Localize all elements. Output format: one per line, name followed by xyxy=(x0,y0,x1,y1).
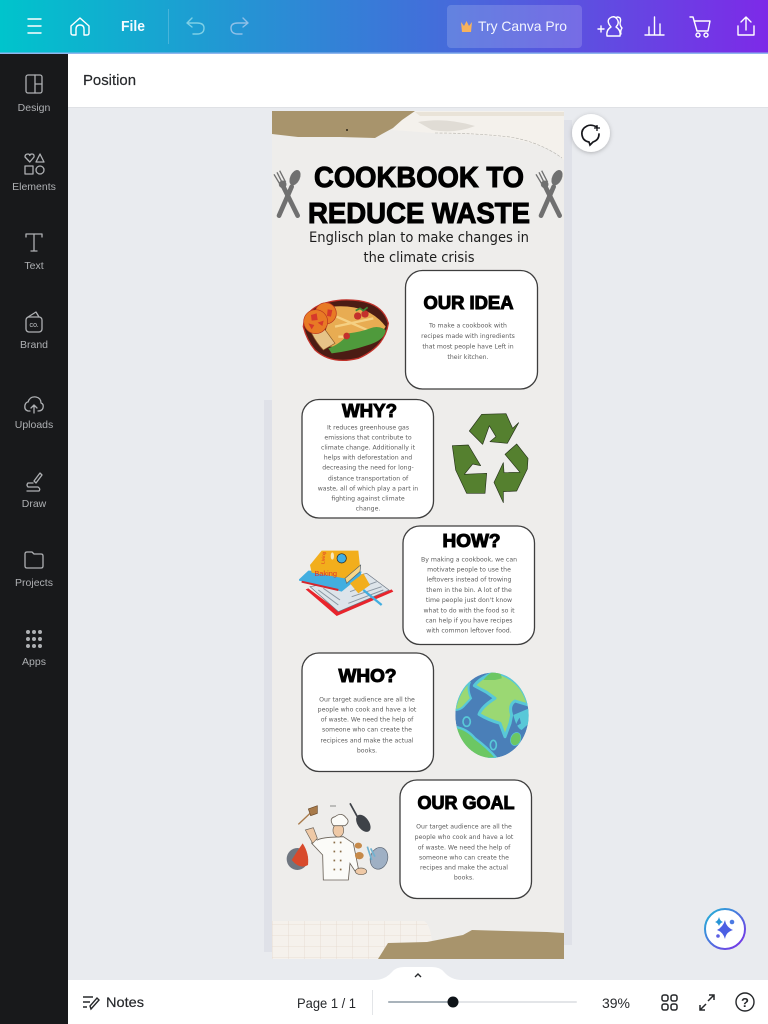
brand tab: Brand xyxy=(20,339,48,351)
button: add comment xyxy=(572,114,610,152)
projects tab xyxy=(15,552,53,589)
card: why: helps with deforestation and xyxy=(324,454,412,462)
torn brown paper top xyxy=(272,111,415,138)
apps tab xyxy=(22,630,46,668)
position bar: Position xyxy=(83,73,136,89)
page indicator: Page 1 / 1 xyxy=(297,995,356,1011)
design tab: Design xyxy=(18,102,51,114)
card: our idea: their kitchen. xyxy=(447,354,489,361)
card: how: By making a cookbook, we can xyxy=(421,556,517,564)
brand tab xyxy=(20,312,48,351)
card: how: them in the bin. A lot of the xyxy=(426,587,512,594)
brand tab: CO. xyxy=(30,323,39,329)
file menu: File xyxy=(121,19,145,35)
notes button: Notes xyxy=(106,994,144,1010)
card: our idea xyxy=(406,270,538,389)
icon: add people xyxy=(598,17,622,36)
card: how: what to do with the food so it xyxy=(423,608,515,614)
card: why: distance transportation of xyxy=(328,476,409,482)
illustration: food bowl xyxy=(303,300,388,360)
card: who: people who cook and have a lot xyxy=(318,706,417,714)
card: our idea: that most people have Left in xyxy=(422,344,514,350)
icon: insights xyxy=(645,17,664,35)
card: who: recipices and make the actual xyxy=(320,738,414,744)
illustration: cookbooks: Baking xyxy=(314,569,337,578)
card: who: Our target audience are all the xyxy=(319,696,415,704)
text tab xyxy=(24,234,44,272)
card: our goal: books. xyxy=(454,874,474,882)
torn white paper top xyxy=(392,111,564,160)
icon: earth xyxy=(454,671,529,760)
top toolbar xyxy=(0,0,768,54)
card: why: It reduces greenhouse gas xyxy=(327,424,409,432)
projects tab: Projects xyxy=(15,577,53,589)
draw tab xyxy=(22,473,47,510)
card: our goal: Our target audience are all the xyxy=(416,824,512,830)
icon: redo xyxy=(231,18,248,34)
illustration: chef xyxy=(287,803,390,880)
card: our goal: someone who can create the xyxy=(419,854,509,862)
title: REDUCE WASTE xyxy=(308,198,530,230)
torn brown paper bottom xyxy=(378,930,564,959)
card: how xyxy=(403,526,534,644)
icon: menu xyxy=(28,19,41,33)
card: who: of waste. We need the help of xyxy=(321,716,414,724)
card: our idea: recipes made with ingredients xyxy=(421,333,515,340)
card: our goal: people who cook and have a lot xyxy=(415,834,514,841)
card: how: HOW? xyxy=(442,531,500,551)
icon: help xyxy=(736,993,754,1011)
icon: fullscreen xyxy=(700,995,714,1010)
try canva pro button xyxy=(447,5,582,48)
uploads tab xyxy=(15,397,53,431)
card: why: WHY? xyxy=(342,401,397,421)
card: our goal xyxy=(400,780,532,898)
card: why xyxy=(302,400,434,518)
subtitle: Englisch plan to make changes in xyxy=(309,230,529,246)
card: how: can help if you have recipes xyxy=(425,618,513,624)
position bar xyxy=(68,54,768,108)
card: why: climate change. Additionally it xyxy=(321,444,416,452)
card: who: WHO? xyxy=(338,666,396,686)
icon: share xyxy=(738,17,754,35)
elements tab: Elements xyxy=(12,181,56,193)
card: our goal: OUR GOAL xyxy=(418,793,515,813)
card: why: waste, all of which play a part in xyxy=(318,486,418,492)
card: why: emissions that contribute to xyxy=(324,434,412,442)
icon: home xyxy=(71,18,89,35)
zoom percentage: 39% xyxy=(602,995,630,1011)
card: why: change. xyxy=(356,506,380,512)
card: our goal: of waste. We need the help of xyxy=(418,844,511,852)
icon: fork and spoon left xyxy=(274,168,303,216)
icon: fork and spoon right xyxy=(536,168,565,216)
card: who: someone who can create the xyxy=(322,726,412,734)
subtitle: the climate crisis xyxy=(364,250,474,266)
card: how: with common leftover food. xyxy=(426,628,512,634)
icon: cart xyxy=(690,17,710,31)
bottom bar xyxy=(0,967,768,1024)
illustration: cookbooks xyxy=(299,551,393,616)
page shadow strips xyxy=(264,120,572,952)
card: our idea: To make a cookbook with xyxy=(428,322,507,330)
left sidebar xyxy=(0,54,68,1024)
title: COOKBOOK TO xyxy=(314,162,524,194)
design tab xyxy=(18,75,51,114)
grid paper bottom xyxy=(272,921,432,959)
card: who: books. xyxy=(357,748,377,754)
icon: caret xyxy=(415,974,421,977)
illustration: cookbooks: Living xyxy=(320,551,326,564)
try canva pro button: Try Canva Pro xyxy=(478,18,567,34)
title xyxy=(308,162,530,230)
icon: undo xyxy=(187,18,204,34)
card: why: decreasing the need for long- xyxy=(322,464,414,472)
card: how: time people just don't know xyxy=(426,597,512,604)
infographic page xyxy=(272,111,565,959)
subtitle xyxy=(309,230,529,266)
icon: help: ? xyxy=(741,995,749,1010)
panel collapse tab xyxy=(374,967,462,980)
card: why: fighting against climate xyxy=(331,496,405,502)
card: our idea: OUR IDEA xyxy=(424,293,514,313)
icon: crown xyxy=(461,21,472,32)
uploads tab: Uploads xyxy=(15,419,53,431)
card: how: leftovers instead of trowing xyxy=(427,576,512,584)
card: how: motivate people to use the xyxy=(427,566,511,574)
icon: recycle xyxy=(452,414,528,503)
zoom slider xyxy=(388,996,577,1008)
text tab: Text xyxy=(24,260,44,272)
elements tab xyxy=(12,154,56,193)
card: who xyxy=(302,653,434,772)
apps tab: Apps xyxy=(22,656,46,668)
notes button xyxy=(83,994,144,1010)
card: our goal: recipes and make the actual xyxy=(420,864,508,872)
button: magic assistant xyxy=(705,909,745,949)
draw tab: Draw xyxy=(22,498,47,510)
icon: grid view xyxy=(662,995,677,1010)
